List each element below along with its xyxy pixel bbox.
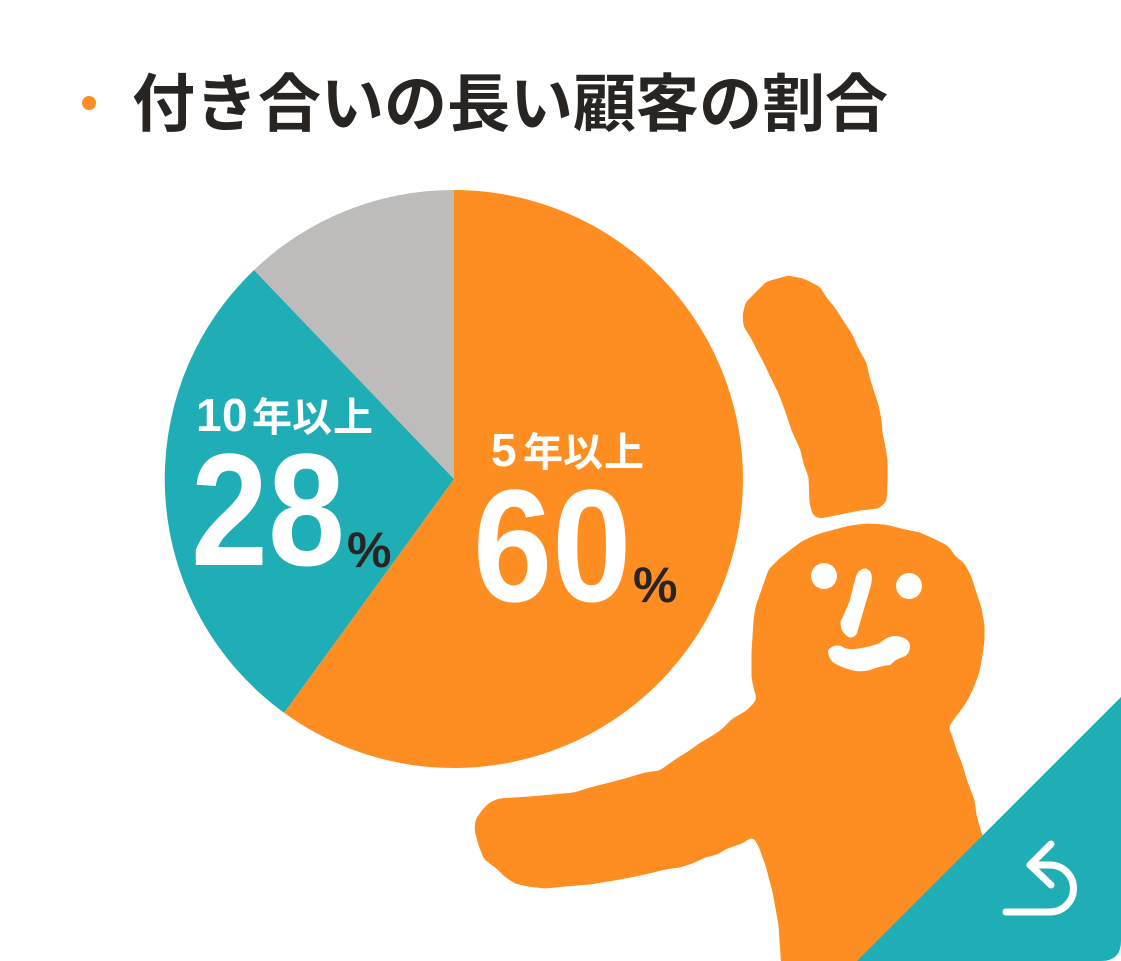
teal corner triangle [857, 697, 1121, 961]
left eye [811, 563, 837, 589]
title bullet [82, 96, 96, 110]
label: 5 years or more 60% [473, 424, 677, 636]
title: 付き合いの長い顧客の割合 [132, 70, 888, 140]
pie chart [165, 190, 743, 768]
icon: return arrow [1006, 844, 1074, 912]
label: 10 years or more 28% [191, 389, 391, 599]
pie slice: remainder [254, 190, 454, 479]
value: 28: 28 [191, 421, 345, 599]
pie slice: 10 years or more [165, 270, 454, 713]
back button corner [857, 697, 1121, 961]
percent sign: % [633, 557, 677, 613]
label text: 10年以上: 年以上 [252, 396, 373, 440]
rabbit ear [744, 277, 886, 517]
character: orange rabbit [476, 277, 983, 961]
label text: 5年以上: 5 [491, 424, 517, 476]
pie slice: 5 years or more [284, 190, 743, 768]
mouth [829, 637, 909, 670]
right eye [896, 573, 922, 599]
nose [842, 570, 870, 636]
label text: 10年以上: 10 [196, 389, 248, 441]
rabbit head, body and arm [476, 525, 983, 961]
label text: 5年以上: 年以上 [523, 431, 644, 475]
value: 60: 60 [473, 457, 631, 636]
percent sign: % [347, 522, 391, 578]
